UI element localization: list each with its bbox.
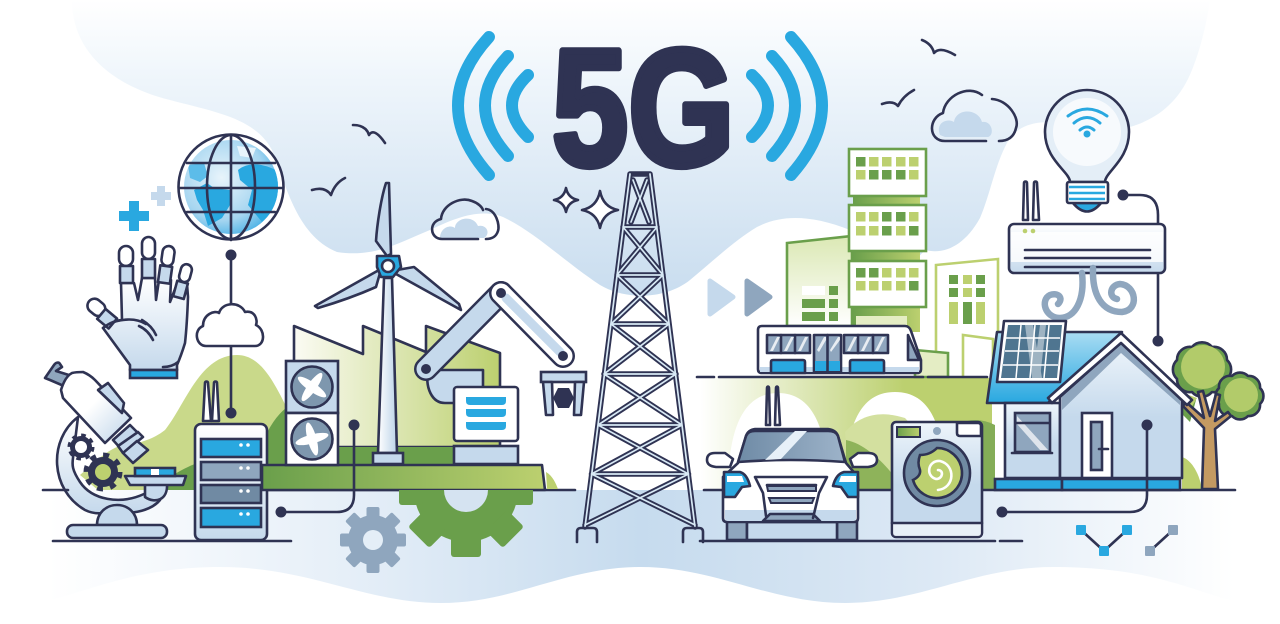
ground lines left	[43, 490, 575, 541]
road line upper	[697, 376, 987, 378]
cooling fans	[286, 361, 338, 465]
wifi symbol	[1068, 109, 1107, 138]
signal waves left	[458, 37, 528, 175]
microscope	[45, 363, 186, 538]
cloud: middle	[432, 200, 498, 239]
main body	[1060, 343, 1182, 478]
base	[97, 505, 137, 525]
mirrors	[707, 453, 733, 467]
drawers	[201, 439, 261, 527]
hills: left	[80, 355, 290, 490]
wind turbine	[315, 183, 461, 464]
roof trim	[1048, 333, 1192, 405]
gear: grey-blue	[340, 507, 406, 573]
washing machine	[892, 422, 982, 537]
robotic hand	[85, 237, 193, 378]
signal waves right	[752, 37, 822, 175]
car	[707, 386, 877, 540]
house	[987, 321, 1192, 490]
wing	[1005, 403, 1060, 478]
arm	[57, 417, 160, 513]
air conditioner	[1009, 182, 1165, 273]
controller box	[454, 387, 518, 441]
connector: bulb to house	[1118, 190, 1164, 346]
cloud: network	[197, 304, 263, 346]
gears	[70, 436, 120, 489]
network icon: blue	[1076, 525, 1132, 556]
antennas	[766, 386, 770, 425]
building: small annex	[915, 350, 948, 377]
eyepiece	[45, 363, 85, 392]
foliage: large	[1173, 342, 1231, 397]
air swirls	[1045, 268, 1134, 318]
signal tower	[577, 174, 703, 542]
headlights	[724, 472, 750, 497]
blades	[376, 183, 391, 256]
solar panel	[997, 321, 1066, 382]
gear: green	[399, 490, 533, 557]
small hill right of platform	[546, 472, 558, 489]
roof	[987, 332, 1122, 403]
windshield	[738, 431, 845, 462]
cloud: right	[932, 91, 1017, 141]
wheels	[727, 520, 747, 540]
window	[1015, 413, 1050, 452]
robot arm	[421, 288, 586, 464]
train	[758, 326, 921, 373]
tube	[61, 372, 131, 443]
grille	[755, 477, 827, 518]
network icon: grey	[1145, 525, 1178, 556]
trunk	[1183, 391, 1231, 489]
door	[1082, 413, 1112, 478]
lens	[113, 425, 148, 463]
connector: house	[996, 420, 1152, 518]
hills and arches: right	[700, 378, 1202, 490]
building: right	[936, 259, 998, 377]
building: left	[787, 236, 852, 326]
sparkles	[554, 188, 618, 228]
hub	[377, 256, 401, 277]
sky background blob	[72, 0, 1210, 330]
title: 5G: 5G	[552, 16, 735, 201]
green platform	[262, 465, 545, 490]
gripper	[541, 372, 586, 382]
stage	[145, 484, 167, 500]
globe	[178, 134, 284, 240]
server rack	[195, 382, 267, 540]
fingers	[85, 237, 193, 329]
body	[723, 429, 858, 522]
connector: globe to server	[226, 250, 236, 418]
connector: factory	[276, 420, 360, 518]
clip	[98, 383, 124, 413]
base	[995, 479, 1062, 490]
factory	[290, 326, 500, 466]
road line lower	[700, 490, 1235, 541]
ground wash	[48, 490, 1234, 603]
light bulb	[1045, 90, 1129, 212]
windows	[856, 157, 918, 290]
building: tall tower	[849, 149, 926, 332]
play arrows	[710, 281, 770, 314]
foliage: small	[1216, 373, 1263, 419]
birds	[312, 40, 955, 195]
plus icons	[119, 186, 171, 231]
tree	[1173, 342, 1263, 489]
